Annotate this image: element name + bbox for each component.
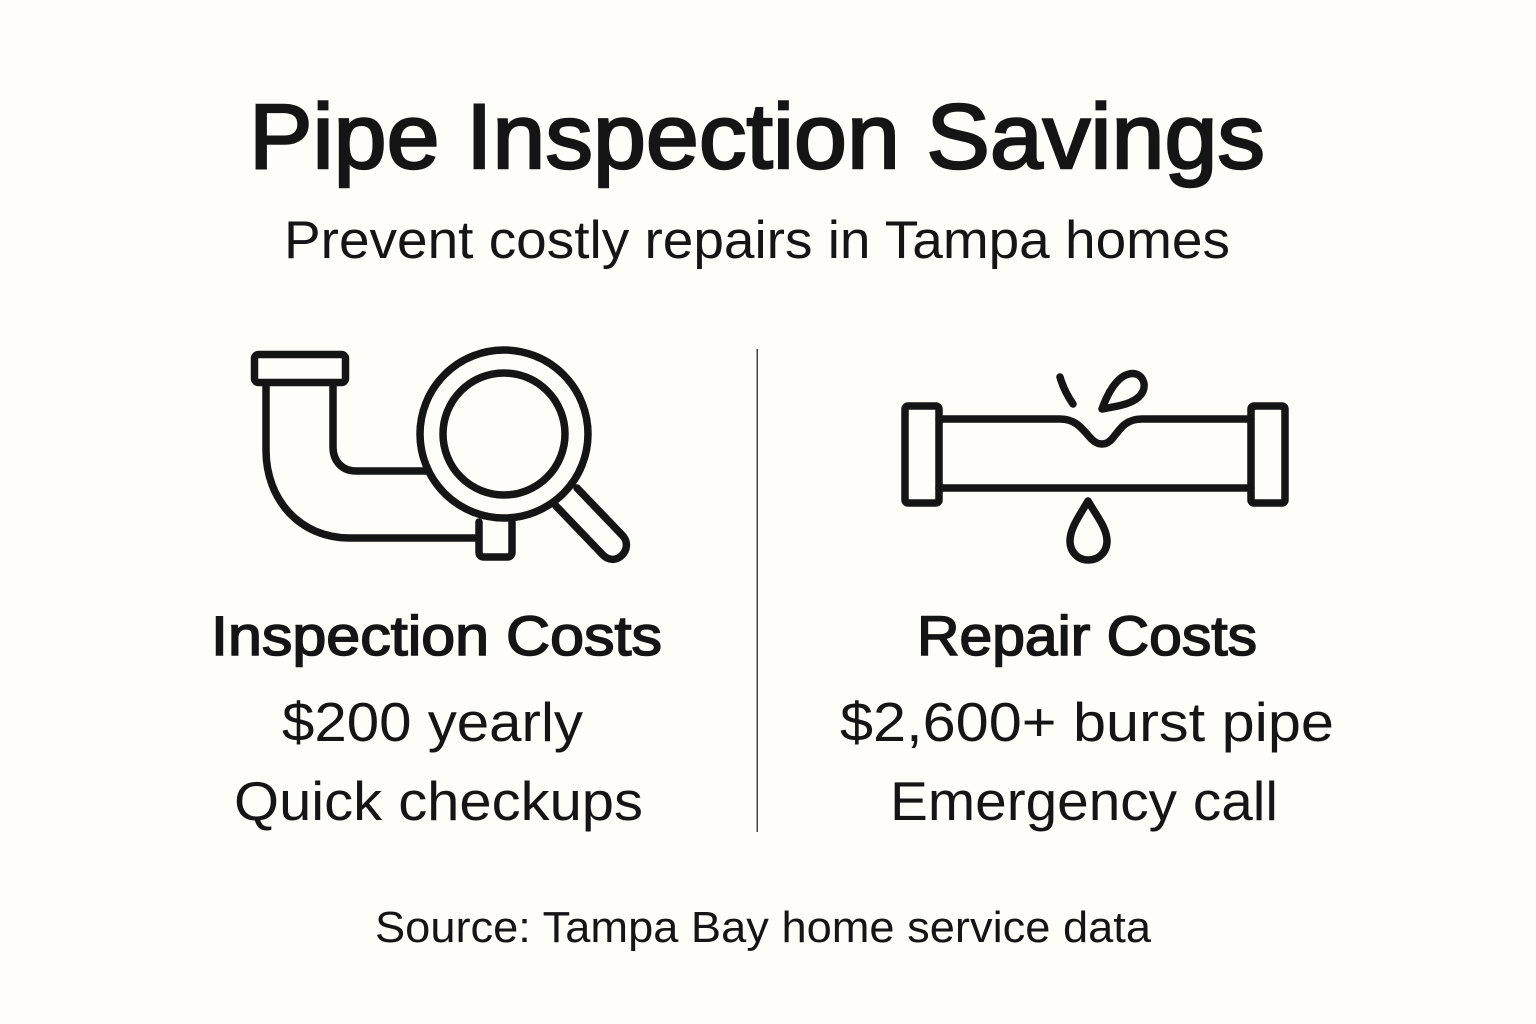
heading: inspection costs: Inspection Costs (211, 604, 662, 667)
icon: burst pipe (905, 373, 1285, 560)
pipe bottom wall (939, 484, 1251, 492)
right column text (840, 604, 1334, 832)
right flange (1251, 406, 1285, 503)
spray droplet (1102, 373, 1144, 409)
pipe end collar (479, 522, 512, 557)
falling droplet (1070, 501, 1107, 560)
left column text (211, 604, 662, 832)
repair note: Emergency call (890, 770, 1278, 832)
inspection price: $200 yearly (282, 691, 584, 753)
heading: repair costs: Repair Costs (917, 604, 1257, 667)
left flange (905, 406, 939, 503)
subtitle: Prevent costly repairs in Tampa homes (284, 211, 1230, 270)
magnifier lens (443, 373, 565, 495)
source note: Source: Tampa Bay home service data (375, 903, 1152, 952)
divider (756, 349, 758, 832)
repair price: $2,600+ burst pipe (840, 691, 1334, 753)
pipe body (266, 384, 476, 538)
magnifier outer ring (420, 350, 588, 518)
pipe top wall with dent (939, 419, 1251, 444)
spray streak (1060, 377, 1073, 404)
icon: pipe with magnifying glass (254, 350, 626, 559)
title: Pipe Inspection Savings (249, 86, 1265, 188)
magnifier handle (556, 488, 626, 559)
pipe cap (254, 354, 346, 382)
inspection note: Quick checkups (234, 770, 643, 832)
